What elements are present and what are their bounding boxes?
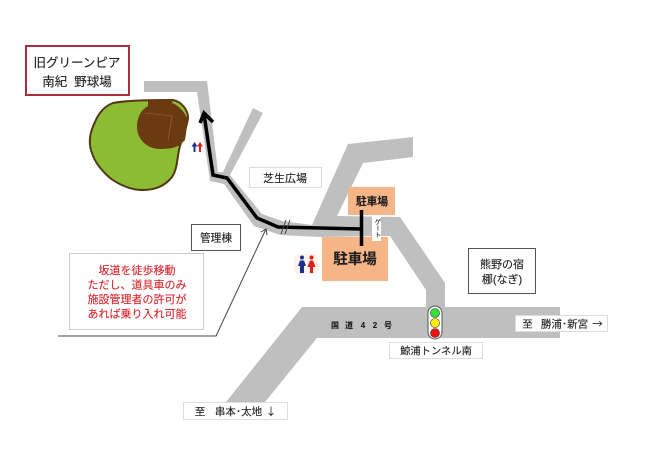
callout leader arrow [58, 229, 267, 336]
lawn plaza label [250, 168, 322, 188]
Kumano no Yado label: 梛(なぎ) [482, 272, 522, 286]
traffic signal name label: 鯨浦トンネル南 [400, 344, 472, 358]
direction label: Kushimoto [184, 402, 288, 420]
gate label: ゲート [373, 218, 381, 238]
direction label: Kushimoto: 串本･太地 [215, 405, 263, 418]
Kumano no Yado label [468, 248, 536, 294]
large parking: 駐車場 [333, 250, 377, 268]
management building label: 管理棟 [200, 232, 232, 244]
direction label: Katsuura: 勝浦･新宮 [541, 318, 588, 330]
outfield [90, 100, 188, 190]
direction label: Katsuura: 至 [522, 318, 533, 330]
large parking [322, 237, 388, 281]
traffic signal name label [390, 342, 482, 358]
walking note callout: ただし、道具車のみ [88, 278, 186, 292]
traffic light [428, 306, 442, 339]
small parking [348, 187, 395, 215]
gate label [372, 215, 381, 241]
walking note callout: 施設管理者の許可が [88, 292, 186, 306]
walking note callout: 坂道を徒歩移動 [98, 263, 176, 277]
title box: 南紀 野球場 [42, 74, 112, 89]
direction label: Kushimoto: ↓ [266, 404, 276, 419]
walking route arrow [200, 113, 361, 229]
walking note callout: あれば乗り入れ可能 [88, 306, 186, 320]
icon: small restroom [192, 142, 203, 152]
icon: large restroom [294, 254, 318, 274]
baseball field [90, 100, 188, 190]
infield [137, 100, 188, 149]
management building label [192, 224, 240, 250]
title box [26, 46, 129, 95]
road network [144, 81, 560, 402]
gate bar [360, 210, 363, 246]
road break mark [281, 220, 290, 234]
small parking: 駐車場 [356, 195, 388, 208]
direction label: Katsuura: → [592, 316, 603, 332]
route 42 label: 国道42号 [331, 320, 392, 330]
Kumano no Yado label: 熊野の宿 [480, 257, 524, 271]
infield lines [145, 113, 172, 141]
title box: 旧グリーンピア [34, 56, 120, 70]
walking note callout [70, 254, 204, 330]
lawn plaza label: 芝生広場 [263, 171, 307, 185]
direction label: Kushimoto: 至 [195, 406, 205, 418]
direction label: Katsuura [516, 316, 608, 332]
